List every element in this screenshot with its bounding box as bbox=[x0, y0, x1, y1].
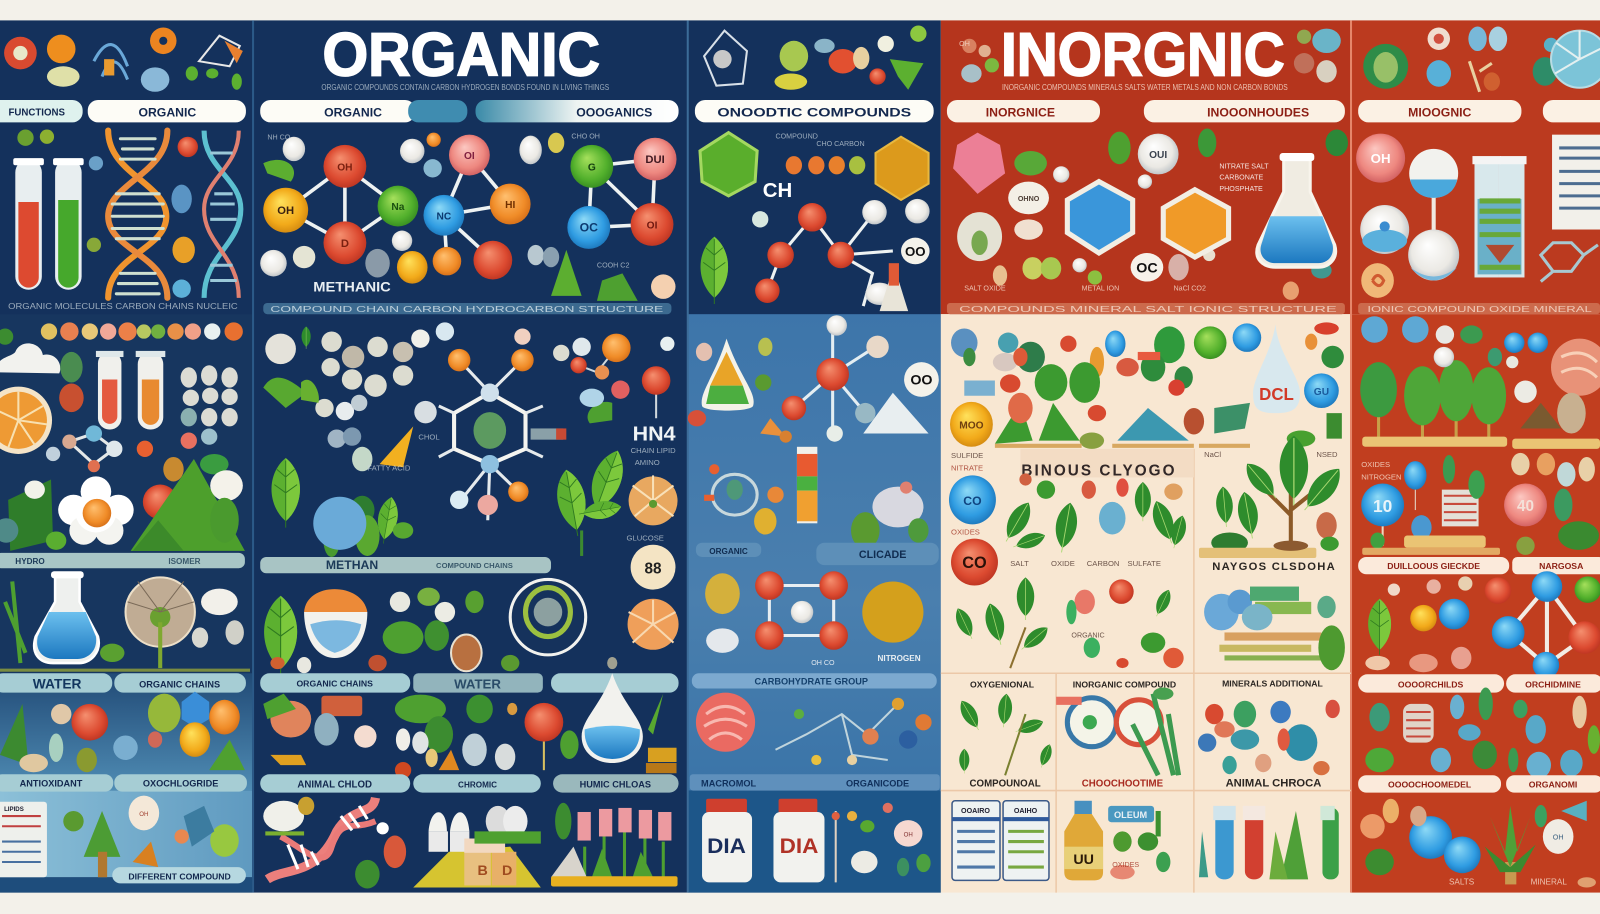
panel: organic, dark navy side bbox=[0, 20, 941, 893]
panel: inorganic, red and cream side bbox=[941, 20, 1600, 893]
col3 bottom icons bbox=[832, 803, 931, 882]
right red col: row 2 bits: NITROGEN bbox=[1361, 472, 1402, 481]
strip labels under top row: COMPOUND CHAIN CARBON HYDROCARBON STRUCTURE bbox=[270, 305, 664, 314]
icon: inorganic small balls and granules: OUI bbox=[1149, 150, 1167, 161]
icon: red ball with stem bbox=[524, 703, 563, 770]
right col bottom: white oval and fruit: MINERAL bbox=[1531, 877, 1567, 886]
icon: tall test tubes with green layers bbox=[1472, 156, 1527, 277]
icon: orange slice bbox=[0, 387, 52, 454]
cream: small captions bbox=[951, 450, 1338, 568]
header pills row: ONOODTIC COMPOUNDS bbox=[717, 105, 911, 119]
header pills row bbox=[0, 100, 1600, 122]
icon: blue ball on cream: GU bbox=[1314, 387, 1329, 398]
right red col: ball labelled 10 bbox=[1361, 484, 1404, 546]
right col bottom: white oval and fruit bbox=[1360, 799, 1596, 887]
badge: round cream: 88 bbox=[645, 560, 662, 577]
cream row 3 plants: ORGANIC bbox=[1071, 632, 1105, 640]
icon: white paper with lines bbox=[1552, 135, 1600, 230]
label pill: METHAN bbox=[260, 557, 551, 573]
icon: flask with blue liquid bbox=[1257, 153, 1336, 267]
right col bottom: two blue balls bbox=[1409, 816, 1481, 873]
icon: pink-red ball: OH bbox=[1371, 151, 1391, 166]
label pills: WATER row left bbox=[0, 673, 246, 693]
molecule diagram: col3 top bbox=[752, 133, 930, 311]
icon: cloud bbox=[0, 343, 60, 373]
cream label row 660 bbox=[970, 679, 1323, 690]
icon: inorganic small balls and granules: NaCl CO2 bbox=[1173, 285, 1206, 293]
label pills: right col 760 row bbox=[1358, 775, 1600, 793]
icon: white pyramid bbox=[863, 393, 929, 434]
icon: village on yellow hill bbox=[413, 806, 541, 887]
header pills row: ORGANIC bbox=[138, 105, 196, 119]
label: HN4: HN4 bbox=[633, 424, 676, 446]
right red col: ball labelled 40 bbox=[1504, 484, 1547, 526]
icon: orange shell bbox=[628, 599, 679, 650]
plants, left row 3 bbox=[0, 581, 250, 670]
icon: granule grid bbox=[181, 365, 238, 445]
label pills: right col 550 row: DUILLOOUS GIECKDE bbox=[1387, 561, 1480, 571]
label pills: WATER row left: ORGANIC CHAINS bbox=[139, 680, 220, 690]
cream: small captions: SALT bbox=[1010, 559, 1029, 568]
icon: twin data cards: OAIHO bbox=[1014, 807, 1038, 815]
molecule diagram: organic left cluster: OH bbox=[277, 205, 294, 217]
plants lower left row 2 bbox=[0, 459, 245, 551]
right red col: coral ball and blue balls row bbox=[1361, 316, 1600, 434]
icon: village on yellow hill: B bbox=[478, 863, 488, 879]
icon: ring with moss bbox=[510, 579, 586, 655]
icon: tubes and plants, blue red green bbox=[1199, 806, 1339, 879]
title: INORGNIC: INORGNIC bbox=[1001, 20, 1285, 88]
icon: inorganic small balls and granules: CARBONATE bbox=[1219, 174, 1263, 182]
header pills row: OOOGANICS bbox=[576, 105, 652, 119]
cream bottom: mini chemistry: OXIDES bbox=[1112, 861, 1139, 869]
small captions row 2 middle: CHAIN LIPID bbox=[631, 446, 676, 455]
right col bottom: white oval and fruit: OH bbox=[1553, 834, 1564, 842]
scattered balls, upper middle panel: COOH C2 bbox=[597, 261, 629, 269]
scattered balls, upper middle panel: NH CO bbox=[267, 134, 291, 142]
right red col: row 2 bits bbox=[1361, 453, 1599, 555]
icon: pink mineral bbox=[953, 133, 1005, 194]
icon: flask, left panel bbox=[34, 571, 99, 663]
cream label row 760: COMPOUNOAL bbox=[970, 778, 1041, 789]
subtitle strips: INORGANIC COMPOUNDS MINERALS SALTS WATER METALS AND NON CARBON BONDS bbox=[1002, 83, 1288, 92]
label pills: right col 760 row: ORGANOMI bbox=[1529, 780, 1577, 790]
label pills: row 758 middle: CHROMIC bbox=[458, 781, 497, 790]
cream label row 760 bbox=[970, 777, 1321, 789]
label pill: METHAN: COMPOUND CHAINS bbox=[436, 561, 513, 570]
cream: ground strip row bbox=[995, 393, 1342, 449]
label pills: row 758 middle: ANIMAL CHLOD bbox=[297, 780, 372, 791]
label pill: col3 row 758: ORGANICODE bbox=[846, 778, 909, 788]
cream: small captions: SULFATE bbox=[1128, 559, 1161, 568]
icon: large plant on soil bbox=[1199, 436, 1348, 558]
label pills row: y 545 left: ISOMER bbox=[168, 557, 201, 566]
icon: bottle DIA 1 bbox=[702, 799, 752, 882]
icon: bottle DIA 1: DIA bbox=[707, 834, 746, 858]
leaves and stems, row 2 middle bbox=[263, 326, 631, 557]
label pills row: lower left: ANTIOXIDANT bbox=[20, 778, 83, 788]
leaf, bowl row bbox=[264, 596, 297, 677]
molecule diagram: organic right cluster: DUI bbox=[645, 154, 665, 166]
badge: OO: OO bbox=[910, 373, 933, 389]
icon: twin data cards bbox=[952, 801, 1049, 880]
molecule diagram: organic left cluster bbox=[263, 145, 418, 264]
cream: small captions: OXIDE bbox=[1051, 559, 1075, 568]
molecule diagram: organic centre cluster: OI bbox=[464, 151, 475, 162]
cream row 4 plants bbox=[956, 688, 1340, 775]
label pills: row 660 middle: ORGANIC CHAINS bbox=[296, 679, 373, 689]
label: CLICADE bbox=[696, 543, 939, 565]
icon: pink flower stalks on yellow bbox=[551, 803, 678, 886]
cream: small captions: NSED bbox=[1316, 450, 1338, 459]
icons: top of inorganic title panel bbox=[959, 29, 1341, 83]
cream panel: blobs, row 1 bbox=[951, 322, 1344, 403]
top-right of organic: col3 decorations bbox=[704, 26, 927, 90]
label pill: bottom left: DIFFERENT COMPOUND bbox=[128, 871, 231, 881]
icon: twin data cards: OOAIRO bbox=[961, 807, 990, 815]
icon: round wheel with sprout bbox=[126, 577, 195, 668]
icon: red ball CO bbox=[951, 539, 998, 586]
label pills: right col 550 row bbox=[1358, 557, 1600, 574]
icon: lattice hexagons bbox=[1541, 243, 1598, 282]
cream: plants row 2 bbox=[998, 473, 1189, 554]
icon: inorganic small balls and granules bbox=[957, 129, 1348, 300]
icon: layered cone flask, col3 bbox=[702, 339, 754, 411]
icons: top right decorations bbox=[1363, 27, 1600, 92]
label pills row: lower left bbox=[0, 774, 247, 792]
right col bottom: white oval and fruit: SALTS bbox=[1449, 877, 1475, 886]
label: OC badge: OC bbox=[1136, 260, 1158, 276]
molecule diagram: organic right cluster bbox=[567, 138, 677, 249]
icon: hourglass of white-blue balls bbox=[1360, 149, 1459, 281]
granule clusters, row 2 middle bbox=[265, 322, 591, 471]
cream bottom: mini chemistry: OLEUM bbox=[1114, 810, 1148, 820]
label: METHANIC: METHANIC bbox=[313, 280, 391, 296]
icon: document card bbox=[0, 802, 47, 877]
icons: oval and fruit on light blue: OH bbox=[139, 811, 148, 818]
cream: small captions: CARBON bbox=[1087, 559, 1119, 568]
label pill: col3 row 660 bbox=[692, 673, 937, 689]
right red col: ball labelled 10: 10 bbox=[1373, 496, 1392, 516]
label: OC badge bbox=[1131, 253, 1163, 282]
row 2, left: beads bbox=[0, 322, 243, 345]
icon: leaf bbox=[701, 237, 728, 304]
icon: blue ball, large bbox=[313, 497, 366, 550]
label pill: col3 row 660: CARBOHYDRATE GROUP bbox=[754, 676, 868, 686]
molecule diagram: organic centre cluster: HI bbox=[505, 200, 515, 211]
icon: yellow ball bbox=[950, 402, 993, 447]
icon: DNA helix, orange bbox=[108, 131, 167, 298]
label pills row: y 545 left: HYDRO bbox=[15, 557, 45, 566]
icon: swirl shell bbox=[1361, 263, 1394, 298]
icon: pink-red ball bbox=[1356, 134, 1405, 183]
icon: water drop bbox=[582, 673, 643, 763]
label pills: right col 660 row bbox=[1358, 674, 1600, 693]
icon: shell bbox=[629, 475, 678, 525]
label pill: bottom left bbox=[112, 867, 246, 883]
molecule diagram: organic left cluster: OH bbox=[337, 162, 353, 173]
icon: village on yellow hill: D bbox=[502, 863, 512, 879]
icon: palm plant bbox=[1485, 806, 1536, 884]
cream label row 660: INORGANIC COMPOUND bbox=[1073, 680, 1176, 690]
small captions row 2 middle: AMINO bbox=[635, 458, 660, 467]
icon: yellow ball: MOO bbox=[959, 420, 984, 431]
icon: bottle DIA 2 bbox=[773, 799, 824, 882]
right red col: row 2 bits: OXIDES bbox=[1361, 460, 1390, 469]
label pills: row 758 middle bbox=[260, 774, 679, 793]
label pills: right col 660 row: OOOORCHILDS bbox=[1398, 680, 1464, 690]
scattered balls, upper middle panel: CHO OH bbox=[571, 133, 600, 141]
icons: top left decorations bbox=[4, 28, 243, 92]
label: CH: CH bbox=[763, 180, 792, 202]
label pills: WATER row left: WATER bbox=[33, 677, 82, 692]
col3 mid blobs bbox=[688, 338, 929, 549]
icons: oval and fruit on light blue bbox=[129, 796, 239, 867]
icon: amber bottle bbox=[1064, 801, 1103, 880]
molecule diagram: organic centre cluster: NC bbox=[437, 211, 452, 222]
cream label row 660: OXYGENIONAL bbox=[970, 680, 1035, 690]
molecule: small, left panel bbox=[46, 352, 229, 481]
right red col: ball labelled 40: 40 bbox=[1517, 498, 1534, 515]
label: CLICADE: ORGANIC bbox=[709, 547, 748, 556]
icon: blue ball on cream 2 bbox=[949, 475, 996, 524]
molecule: white hexagon with nodes bbox=[439, 349, 543, 520]
strip labels under top row bbox=[263, 303, 1600, 314]
icon: orange ball bbox=[143, 485, 178, 519]
label pill: col3 row 758 bbox=[690, 774, 940, 791]
cream: small captions: NaCl bbox=[1204, 450, 1221, 459]
label pills: right col 660 row: ORCHIDMINE bbox=[1525, 680, 1581, 690]
header pills row: INOOONHOUDES bbox=[1207, 105, 1309, 119]
balls row left panel bbox=[0, 692, 245, 772]
icon: yellow burst bbox=[862, 581, 923, 643]
icon: blue hexagon bbox=[1067, 182, 1133, 253]
right red col: trees bbox=[1360, 360, 1600, 449]
label pills: row 660 middle: WATER bbox=[454, 677, 501, 692]
icon: blue ball on cream 2: CO bbox=[963, 494, 982, 508]
subtitle strips bbox=[321, 83, 1288, 92]
small items, upper left panel: ORGANIC MOLECULES CARBON CHAINS NUCLEIC bbox=[8, 302, 238, 311]
label pills: row 758 middle: HUMIC CHLOAS bbox=[580, 780, 651, 790]
molecule diagram: col3 top: COMPOUND bbox=[776, 133, 818, 141]
col3 bottom icons: OH bbox=[904, 831, 913, 838]
row 680–757 middle items bbox=[263, 694, 677, 778]
small items, upper left panel bbox=[8, 130, 238, 311]
label: BINOUS CLYOGO: BINOUS CLYOGO bbox=[1021, 462, 1175, 479]
right col row 3: balls and leaf bbox=[1365, 576, 1511, 672]
scattered balls, upper middle panel bbox=[260, 133, 676, 301]
badge: round cream bbox=[631, 545, 676, 590]
molecule diagram: organic left cluster: Na bbox=[391, 202, 405, 213]
label pills: row 660 middle bbox=[260, 673, 679, 693]
icons: bottom mid left bbox=[263, 797, 406, 888]
label pill: METHAN: METHAN bbox=[326, 558, 378, 572]
cream label row 760: CHOOCHOOTIME bbox=[1082, 778, 1164, 789]
molecule: col3 row 2 bbox=[782, 315, 889, 442]
molecule diagram: organic right cluster: OI bbox=[647, 221, 658, 231]
icon: gold hexagon bbox=[876, 137, 929, 200]
icon: coral brain bbox=[696, 693, 755, 752]
strip labels under top row: IONIC COMPOUND OXIDE MINERAL bbox=[1367, 305, 1593, 314]
cream: small captions: NITRATE bbox=[951, 463, 983, 472]
label pills row: lower left: OXOCHLOGRIDE bbox=[143, 778, 218, 788]
icon: cone bottle with DCL bbox=[1253, 324, 1300, 413]
molecule: square red nodes bbox=[755, 571, 848, 650]
label: NAYGOS CLSDOHA: NAYGOS CLSDOHA bbox=[1212, 561, 1335, 573]
items beside bowl bbox=[270, 588, 617, 673]
small captions row 2 middle: FATTY ACID bbox=[367, 463, 411, 472]
icon: bowl orange top, blue water bbox=[304, 589, 367, 658]
icon: inorganic small balls and granules: METAL ION bbox=[1082, 285, 1119, 293]
cream row 3 plants bbox=[952, 577, 1345, 670]
small captions row 2 middle bbox=[367, 428, 676, 543]
label: CLICADE: CLICADE bbox=[859, 549, 906, 561]
icon: orange hexagon bbox=[1163, 190, 1229, 257]
col3 small figures row 3: OH CO bbox=[811, 659, 835, 667]
icon: inorganic small balls and granules: PHOSPHATE bbox=[1219, 185, 1263, 193]
title: ORGANIC: ORGANIC bbox=[322, 20, 600, 88]
icon: inorganic small balls and granules: OHNO bbox=[1018, 195, 1040, 203]
icon: inorganic small balls and granules: NITRATE SALT bbox=[1219, 162, 1269, 170]
label pill: col3 row 758: MACROMOL bbox=[701, 778, 756, 788]
header pills row: FUNCTIONS bbox=[8, 107, 66, 118]
icon: green tree bbox=[63, 811, 120, 877]
col3 small figures row 3: NITROGEN bbox=[878, 654, 921, 663]
badge: OO bbox=[904, 362, 939, 397]
molecule diagram: organic right cluster: OC bbox=[580, 221, 598, 235]
molecule diagram: col3 top: CHO CARBON bbox=[816, 140, 865, 148]
header pills row: INORGNICE bbox=[986, 105, 1055, 119]
molecule diagram: col3 top: OO bbox=[905, 244, 926, 259]
strip labels under top row: COMPOUNDS MINERAL SALT IONIC STRUCTURE bbox=[959, 305, 1338, 314]
icon: cone bottle with DCL: DCL bbox=[1259, 384, 1294, 404]
label pills: right col 760 row: OOOOCHOOMEDEL bbox=[1388, 780, 1472, 790]
icon: inorganic small balls and granules: SALT OXIDE bbox=[964, 285, 1006, 293]
header pills row: ORGANIC bbox=[324, 105, 382, 119]
icon: white flower with orange centre bbox=[58, 476, 134, 545]
icons: top of inorganic title panel: OH bbox=[959, 40, 970, 48]
icon: green hexagon molecule bbox=[700, 133, 757, 196]
right col row 4 bbox=[1365, 688, 1600, 778]
icon: red ball CO: CO bbox=[962, 554, 987, 572]
icon: bottle DIA 2: DIA bbox=[780, 834, 818, 858]
subtitle strips: ORGANIC COMPOUNDS CONTAIN CARBON HYDROGEN BONDS FOUND IN LIVING THINGS bbox=[321, 83, 610, 92]
icon: pink DNA helix bbox=[267, 798, 376, 879]
molecule diagram: organic right cluster: G bbox=[588, 162, 596, 173]
icon: amber bottle: UU bbox=[1073, 852, 1094, 868]
icon: test tubes, red and green bbox=[13, 158, 84, 290]
cream: small captions: OXIDES bbox=[951, 528, 980, 537]
cream: small captions: SULFIDE bbox=[951, 451, 983, 460]
molecule diagram: organic left cluster: D bbox=[341, 238, 349, 250]
label pills: right col 550 row: NARGOSA bbox=[1539, 561, 1584, 571]
header pills row: MIOOGNIC bbox=[1408, 105, 1472, 119]
cream label row 660: MINERALS ADDITIONAL bbox=[1222, 679, 1323, 689]
col3 small figures row 3 bbox=[705, 573, 921, 667]
icon: layered tube, col3 bbox=[797, 447, 817, 523]
small captions row 2 middle: GLUCOSE bbox=[627, 534, 664, 543]
molecule: right orange-red chain bbox=[570, 334, 674, 418]
label pills row: y 545 left bbox=[0, 553, 245, 568]
small captions row 2 middle: CHOL bbox=[418, 433, 440, 442]
molecule diagram: organic centre cluster bbox=[423, 135, 531, 280]
icon: DNA helix, blue bbox=[204, 131, 241, 298]
col3 molecule branches row 4 bbox=[776, 698, 932, 765]
molecule: right col row 3 bbox=[1492, 571, 1600, 678]
cream bottom: mini chemistry bbox=[1108, 806, 1170, 879]
icon: document card: LIPIDS bbox=[4, 806, 24, 813]
cream label row 760: ANIMAL CHROCA bbox=[1226, 777, 1321, 789]
icon: tubes with red and orange liquid bbox=[96, 351, 165, 429]
icon: blue ball on cream bbox=[1304, 373, 1339, 408]
